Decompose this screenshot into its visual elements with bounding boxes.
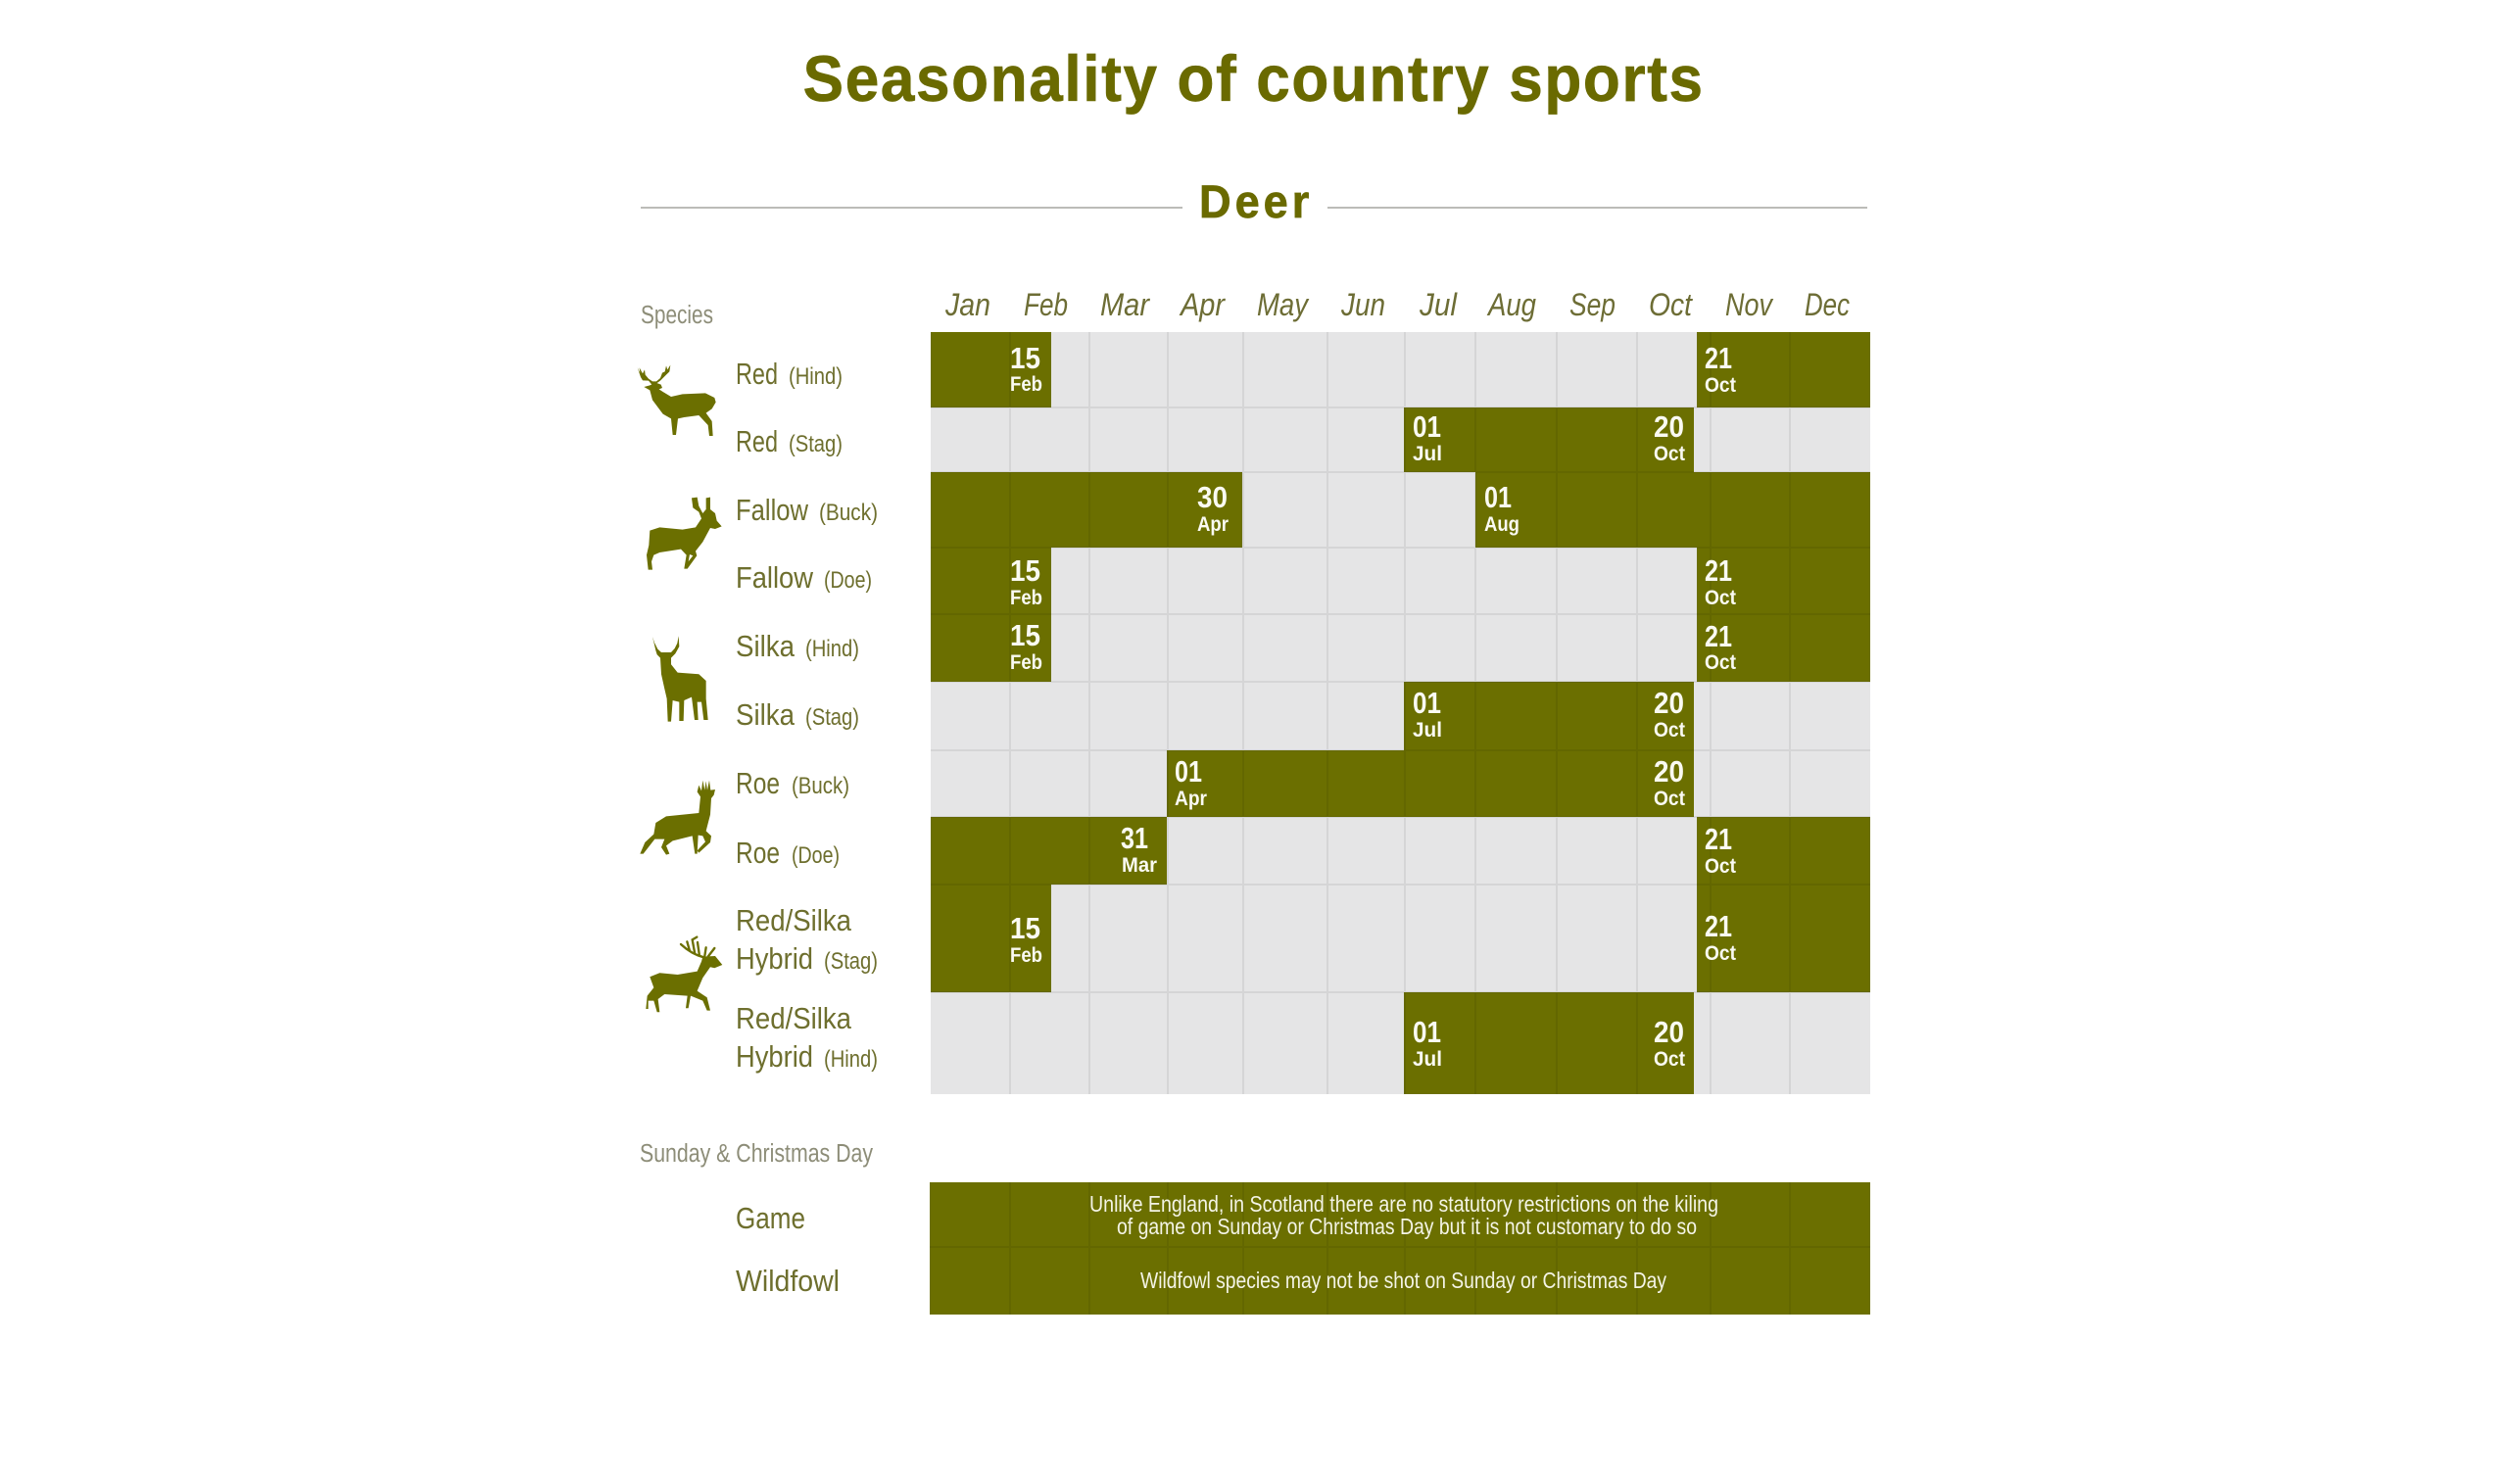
date: 01 Apr: 01 [1175,754,1202,789]
row: Red/Silka Hybrid (Hind) bars [1404,992,1694,1094]
row: Roe (Buck) bars [1167,750,1694,817]
date: 21 Oct: 21 [1705,822,1732,856]
label: Silka (Stag) [736,697,859,732]
species column heading: Species [641,302,713,329]
date: 20 Oct: 20 [1654,754,1684,789]
date: 21 Oct: 21 [1705,909,1732,943]
row: Red (Stag) bars [1404,407,1694,472]
date: 01 Aug: Aug [1484,512,1519,536]
date: 15 Feb [1010,618,1042,674]
date: 15 Feb: 15 [1010,341,1040,375]
date: 15 Feb: 15 [1010,911,1040,945]
label: Roe (Buck): (Buck) [792,773,849,799]
label: Roe (Doe): Roe [736,836,780,870]
date: 21 Oct: Oct [1705,650,1736,674]
note: game: of game on Sunday or Christmas Day but it is not customary to do so [1117,1214,1697,1239]
date: 31 Mar: 31 [1121,821,1148,855]
date: 15 Feb [1010,341,1042,396]
label: Red (Stag) [736,424,843,458]
label: Silka (Stag): Silka [736,697,796,732]
date: 01 Jul: Jul [1413,442,1442,465]
date: 20 Oct [1654,686,1685,742]
icon: hybrid deer [646,937,722,1012]
icon: silka deer [652,636,708,722]
date: 21 Oct: 21 [1705,553,1732,588]
label: Silka (Hind): (Hind) [805,636,859,662]
month headers: Nov [1725,287,1774,322]
row: Silka (Hind) bars [931,614,1870,682]
date: 20 Oct [1654,754,1685,810]
label: Red/Silka Hybrid (Hind): Hybrid [736,1039,813,1074]
date: 20 Oct: Oct [1654,718,1685,742]
date: 20 Oct: 20 [1654,686,1684,720]
date: 21 Oct: 21 [1705,619,1732,653]
heading: Sunday and Christmas Day: Sunday & Christmas Day [640,1140,873,1168]
label: Roe (Doe) [736,836,840,870]
date: 20 Oct [1654,1015,1685,1071]
label: Silka (Hind) [736,629,859,663]
date: 01 Apr: Apr [1175,787,1208,810]
month headers: Dec [1805,287,1850,322]
date: 31 Mar [1121,821,1158,877]
date: 15 Feb: 15 [1010,553,1040,588]
month headers: Feb [1024,287,1068,322]
date: 15 Feb: Feb [1010,943,1042,967]
date: 21 Oct [1705,909,1736,965]
month headers: Sep [1569,287,1616,322]
date: 31 Mar: Mar [1122,853,1158,877]
date: 15 Feb: Feb [1010,586,1042,609]
date: 20 Oct: 20 [1654,1015,1684,1049]
label: Wildfowl: Wildfowl [736,1264,840,1298]
label: Red/Silka Hybrid (Hind): Red/Silka [736,1001,852,1035]
date: 15 Feb [1010,911,1042,967]
label: Fallow (Doe) [736,560,872,595]
note: game [1089,1191,1718,1239]
date: 21 Oct: Oct [1705,854,1736,878]
row: Roe (Doe) bars [931,817,1870,885]
label: Roe (Doe): (Doe) [792,842,840,869]
label: Red (Hind): (Hind) [789,363,843,390]
row: Fallow (Doe) bars [931,548,1870,614]
icon: red deer [638,365,716,436]
date: 21 Oct: Oct [1705,373,1736,397]
date: 15 Feb [1010,553,1042,609]
date: 21 Oct [1705,553,1736,609]
title: Seasonality of country sports [803,42,1703,115]
label: Red (Hind) [736,357,843,391]
season chart [931,332,1870,1094]
label: Fallow (Doe): Fallow [736,560,814,595]
month headers: Jun [1340,287,1385,322]
label: Silka (Stag): (Stag) [805,704,859,731]
label: Red/Silka Hybrid (Hind): (Hind) [824,1046,878,1073]
date: 01 Aug [1484,480,1519,536]
month headers [944,287,1850,322]
date: 21 Oct [1705,619,1736,674]
row: Red (Hind) bars [931,332,1870,407]
date: 01 Jul: 01 [1413,409,1441,444]
date: 15 Feb: Feb [1010,650,1042,674]
date: 21 Oct: Oct [1705,941,1736,965]
date: 01 Jul: Jul [1413,1047,1442,1071]
row: Red/Silka Hybrid (Stag) bars [931,885,1870,992]
label: Fallow (Buck): Fallow [736,493,808,527]
label: Red/Silka Hybrid (Hind) [736,1001,878,1074]
date: 20 Oct: Oct [1654,1047,1685,1071]
date: 01 Jul: 01 [1413,1015,1441,1049]
date: 01 Apr [1175,754,1208,810]
date: 01 Jul [1413,686,1442,742]
month headers: Aug [1486,287,1536,322]
date: 21 Oct: 21 [1705,341,1732,375]
label: Fallow (Buck): (Buck) [819,500,878,526]
date: 20 Oct: Oct [1654,787,1685,810]
date: 20 Oct: Oct [1654,442,1685,465]
label: Game: Game [736,1201,805,1235]
label: Fallow (Buck) [736,493,878,527]
month headers: May [1257,287,1310,322]
note: game: Unlike England, in Scotland there are no statutory restrictions on the kiling [1089,1191,1718,1217]
date: 30 Apr: Apr [1197,512,1230,536]
date: 20 Oct: 20 [1654,409,1684,444]
month headers: Mar [1100,287,1150,322]
label: Red (Stag): Red [736,424,778,458]
label: Red/Silka Hybrid (Stag): Red/Silka [736,903,852,937]
label: Red/Silka Hybrid (Stag): Hybrid [736,941,813,976]
label: Silka (Hind): Silka [736,629,796,663]
label: Red (Hind): Red [736,357,778,391]
label: Red/Silka Hybrid (Stag) [736,903,878,976]
date: 21 Oct [1705,341,1736,397]
row: Fallow (Buck) bars [931,472,1870,548]
section heading: Deer: Deer [1199,175,1309,227]
date: 15 Feb: 15 [1010,618,1040,652]
note: wildfowl: Wildfowl species may not be shot on Sunday or Christmas Day [1140,1268,1666,1293]
date: 01 Jul: 01 [1413,686,1441,720]
month headers: Jul [1419,287,1458,322]
month headers: Apr [1179,287,1226,322]
label: Roe (Buck) [736,766,849,800]
date: 01 Aug: 01 [1484,480,1512,514]
date: 20 Oct [1654,409,1685,465]
date: 30 Apr: 30 [1197,480,1228,514]
label: Red (Stag): (Stag) [789,431,843,457]
month headers: Oct [1649,287,1693,322]
date: 01 Jul [1413,1015,1442,1071]
month headers: Jan [944,287,990,322]
date: 21 Oct: Oct [1705,586,1736,609]
icon: fallow deer [647,498,722,570]
label: Fallow (Doe): (Doe) [824,567,872,594]
date: 30 Apr [1197,480,1230,536]
date: 01 Jul [1413,409,1442,465]
date: 15 Feb: Feb [1010,372,1042,396]
date: 01 Jul: Jul [1413,718,1442,742]
label: Roe (Buck): Roe [736,766,780,800]
panel: Sunday and Christmas Day restrictions [930,1182,1870,1315]
date: 21 Oct [1705,822,1736,878]
row: Silka (Stag) bars [1404,682,1694,750]
label: Red/Silka Hybrid (Stag): (Stag) [824,948,878,975]
icon: roe deer [640,781,715,855]
